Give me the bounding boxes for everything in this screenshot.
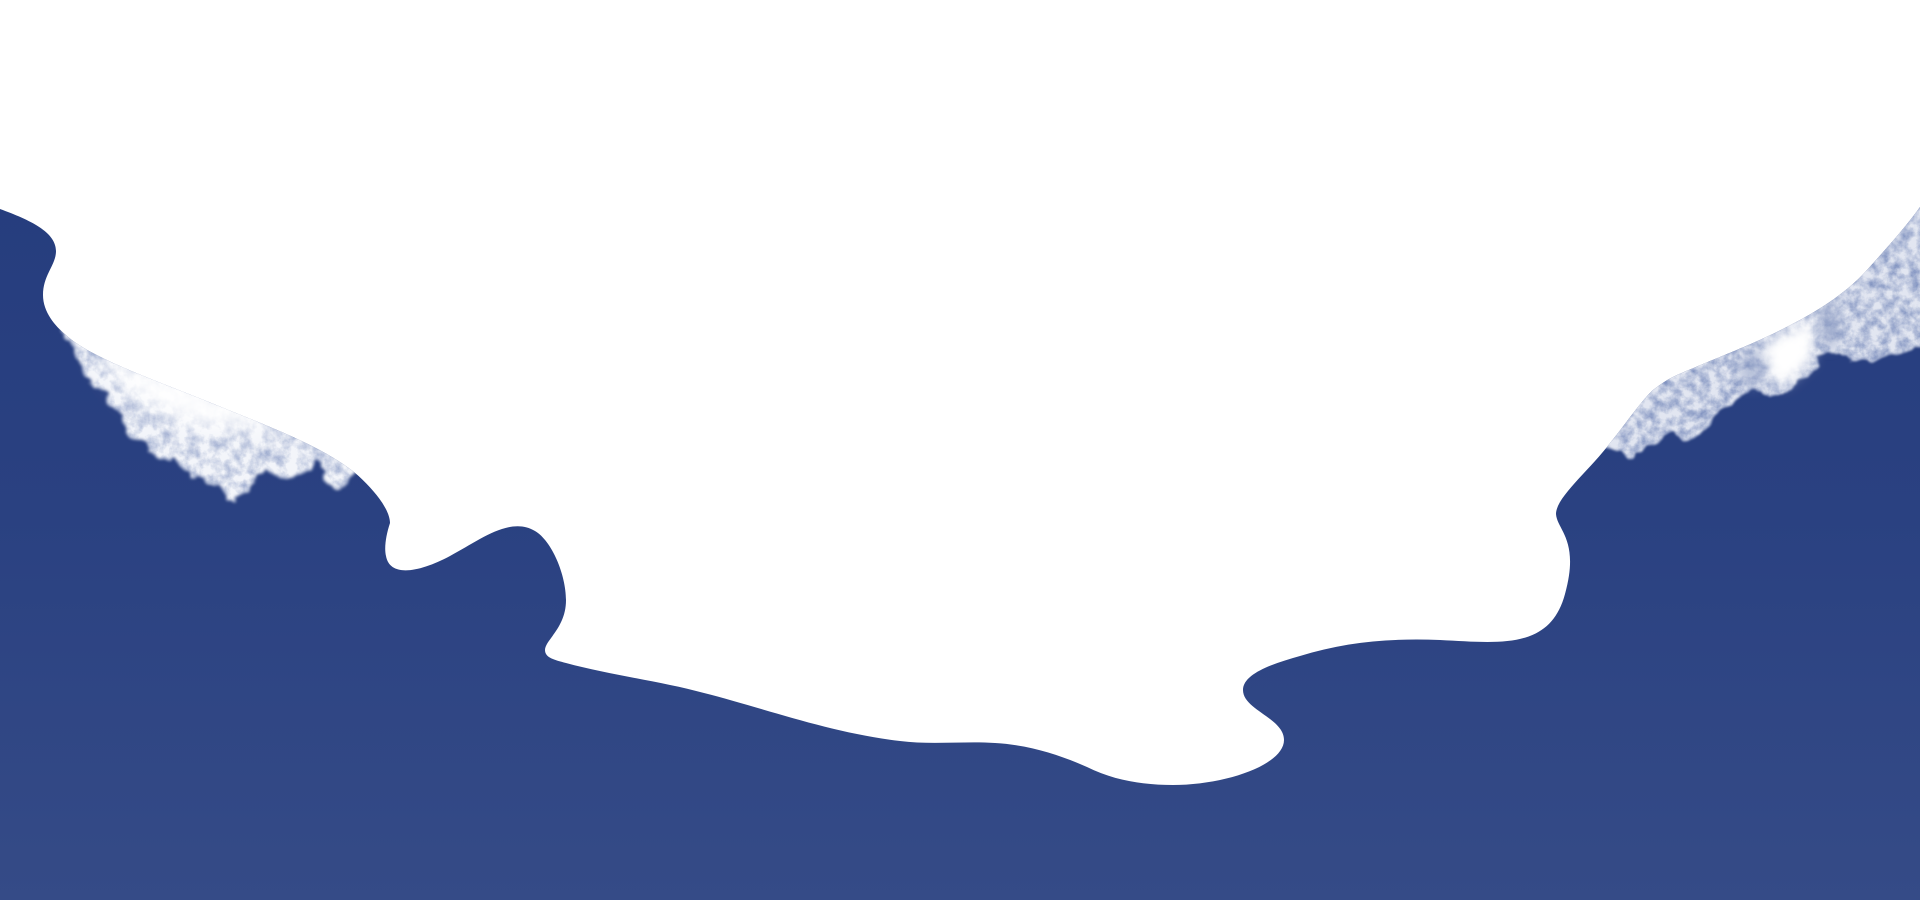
right cloud texture	[1605, 190, 1920, 455]
left cloud texture	[60, 325, 358, 500]
blue field with wavy top edge	[0, 207, 1920, 900]
illustration: white organic shape over blue field	[0, 207, 1920, 900]
